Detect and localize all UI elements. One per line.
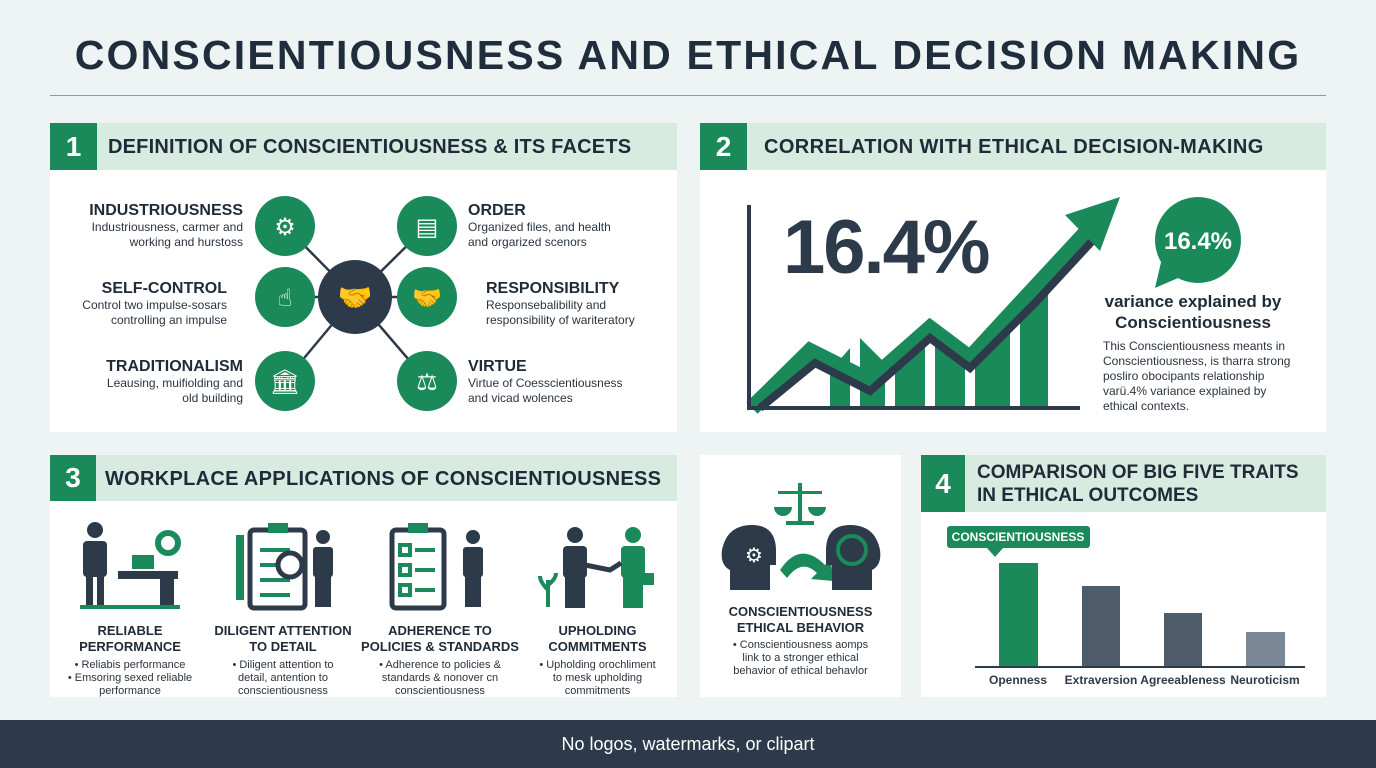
bar chart: CONSCIENTIOUSNESS <box>952 530 1084 544</box>
facet: virtue: Virtue of Coesscientiousness <box>468 376 623 390</box>
item: upholding commitments: commitments <box>565 685 630 697</box>
facet: virtue: and vicad wolences <box>468 391 573 405</box>
item: reliable performance: PERFORMANCE <box>79 639 181 654</box>
paragraph: This Conscientiousness meants in Conscientiousness, is tharra strong posliro obocipants relationship varü.4% variance explained by ethical contexts. <box>1103 339 1290 413</box>
facet network diagram: ⚖ <box>416 368 438 396</box>
item: reliable performance: • Emsoring sexed reliable <box>68 672 192 684</box>
facet: order: and orgarized scenors <box>468 235 587 249</box>
item: adherence: conscientiousness <box>395 685 485 697</box>
growth chart: 16.4% <box>783 205 989 290</box>
item: diligent attention: TO DETAIL <box>249 639 317 654</box>
item: reliable performance: • Reliabis performance <box>75 659 185 671</box>
facet: virtue <box>468 358 623 405</box>
header 3: WORKPLACE APPLICATIONS OF CONSCIENTIOUSNESS <box>105 468 661 490</box>
bar chart: Agreeableness <box>1140 673 1226 687</box>
icons <box>80 522 654 610</box>
item: upholding commitments: COMMITMENTS <box>548 639 647 654</box>
facet: self-control: controlling an impulse <box>111 313 227 327</box>
bar chart: Neuroticism <box>1230 673 1300 687</box>
facet: traditionalism: Leausing, muifiolding and <box>107 376 243 390</box>
panel: definition <box>50 123 677 432</box>
item: reliable performance: performance <box>99 685 161 697</box>
item: adherence <box>361 623 519 697</box>
facet: self-control: SELF-CONTROL <box>102 280 227 297</box>
growth chart <box>746 197 1241 414</box>
ethical behavior text: • Conscientiousness aomps <box>733 639 868 651</box>
ethical behavior text: behavior of ethical behavlor <box>733 665 868 677</box>
icon: heads and scale: ⚙ <box>745 543 763 567</box>
facet: order: Organized files, and health <box>468 220 611 234</box>
facet network diagram: ⚙ <box>274 213 296 241</box>
facet network diagram: ☝ <box>278 284 292 312</box>
item: diligent attention <box>214 623 352 697</box>
facet: responsibility <box>486 280 635 327</box>
facet: virtue: VIRTUE <box>468 358 527 375</box>
item: adherence: ADHERENCE TO <box>388 623 492 638</box>
item: diligent attention: DILIGENT ATTENTION <box>214 623 352 638</box>
item: upholding commitments <box>539 623 656 697</box>
ethical behavior text: link to a stronger ethical <box>742 652 859 664</box>
facet: self-control: Control two impulse-sosars <box>82 298 227 312</box>
facet: responsibility: responsibility of wariteratory <box>486 313 635 327</box>
header 4: 4 <box>935 468 951 498</box>
header 2 <box>700 123 1326 170</box>
facet: responsibility: RESPONSIBILITY <box>486 280 619 297</box>
panel: workplace <box>50 455 677 697</box>
header 3 <box>50 455 677 501</box>
variance text <box>1104 292 1282 332</box>
header 2: CORRELATION WITH ETHICAL DECISION-MAKING <box>764 136 1264 158</box>
facet: traditionalism <box>106 358 243 405</box>
bar chart: Extraversion <box>1065 673 1137 687</box>
facet: traditionalism: old building <box>182 391 243 405</box>
ethical behavior text: CONSCIENTIOUSNESS <box>729 604 872 619</box>
footer <box>0 720 1376 768</box>
facet: traditionalism: TRADITIONALISM <box>106 358 243 375</box>
item: diligent attention: detail, antention to <box>238 672 328 684</box>
header 1 <box>50 123 677 170</box>
item: adherence: POLICIES & STANDARDS <box>361 639 519 654</box>
item: upholding commitments: to mesk upholding <box>553 672 642 684</box>
header 1: 1 <box>66 130 81 162</box>
header 4: IN ETHICAL OUTCOMES <box>977 485 1198 506</box>
header 4: COMPARISON OF BIG FIVE TRAITS <box>977 462 1299 483</box>
facet network diagram: ▤ <box>416 213 438 241</box>
panel: correlation <box>700 123 1326 432</box>
facet: industriousness: INDUSTRIOUSNESS <box>89 202 243 219</box>
ethical behavior text <box>729 604 872 677</box>
item: diligent attention: conscientiousness <box>238 685 328 697</box>
ethical behavior text: ETHICAL BEHAVIOR <box>737 620 864 635</box>
item: upholding commitments: UPHOLDING <box>558 623 636 638</box>
facet: industriousness <box>89 202 243 249</box>
facet: industriousness: Industriousness, carmer and <box>92 220 243 234</box>
item: adherence: standards & nonover cn <box>382 672 498 684</box>
panel: ethical behavior <box>700 455 901 697</box>
variance text: Conscientiousness <box>1115 313 1271 332</box>
facet: order: ORDER <box>468 202 526 219</box>
header 3: 3 <box>65 462 81 493</box>
panel: comparison <box>921 455 1326 697</box>
bar chart <box>947 526 1305 687</box>
facet network diagram: 🤝 <box>338 282 372 313</box>
bar chart: Openness <box>989 673 1047 687</box>
header 2: 2 <box>716 130 731 162</box>
item: reliable performance: RELIABLE <box>98 623 162 638</box>
header 1: DEFINITION OF CONSCIENTIOUSNESS & ITS FACETS <box>108 136 631 158</box>
speech bubble <box>1155 197 1241 283</box>
facet network diagram <box>255 196 457 411</box>
facet: order <box>468 202 611 249</box>
facet: self-control <box>82 280 227 327</box>
growth chart: 16.4% <box>1164 228 1232 255</box>
header 4 <box>921 455 1326 512</box>
item: upholding commitments: • Upholding orochliment <box>539 659 656 671</box>
icon: heads and scale <box>722 483 880 590</box>
facet network diagram: 🏛 <box>270 368 300 396</box>
footer: No logos, watermarks, or clipart <box>561 734 815 754</box>
title: CONSCIENTIOUSNESS AND ETHICAL DECISION MAKING <box>75 32 1301 78</box>
variance text: variance explained by <box>1105 292 1281 311</box>
item: reliable performance <box>68 623 192 697</box>
facet: responsibility: Responsebalibility and <box>486 298 606 312</box>
facet network diagram: 🤝 <box>412 284 442 312</box>
item: diligent attention: • Diligent attention to <box>232 659 334 671</box>
item: adherence: • Adherence to policies & <box>379 659 501 671</box>
facet: industriousness: working and hurstoss <box>130 235 243 249</box>
